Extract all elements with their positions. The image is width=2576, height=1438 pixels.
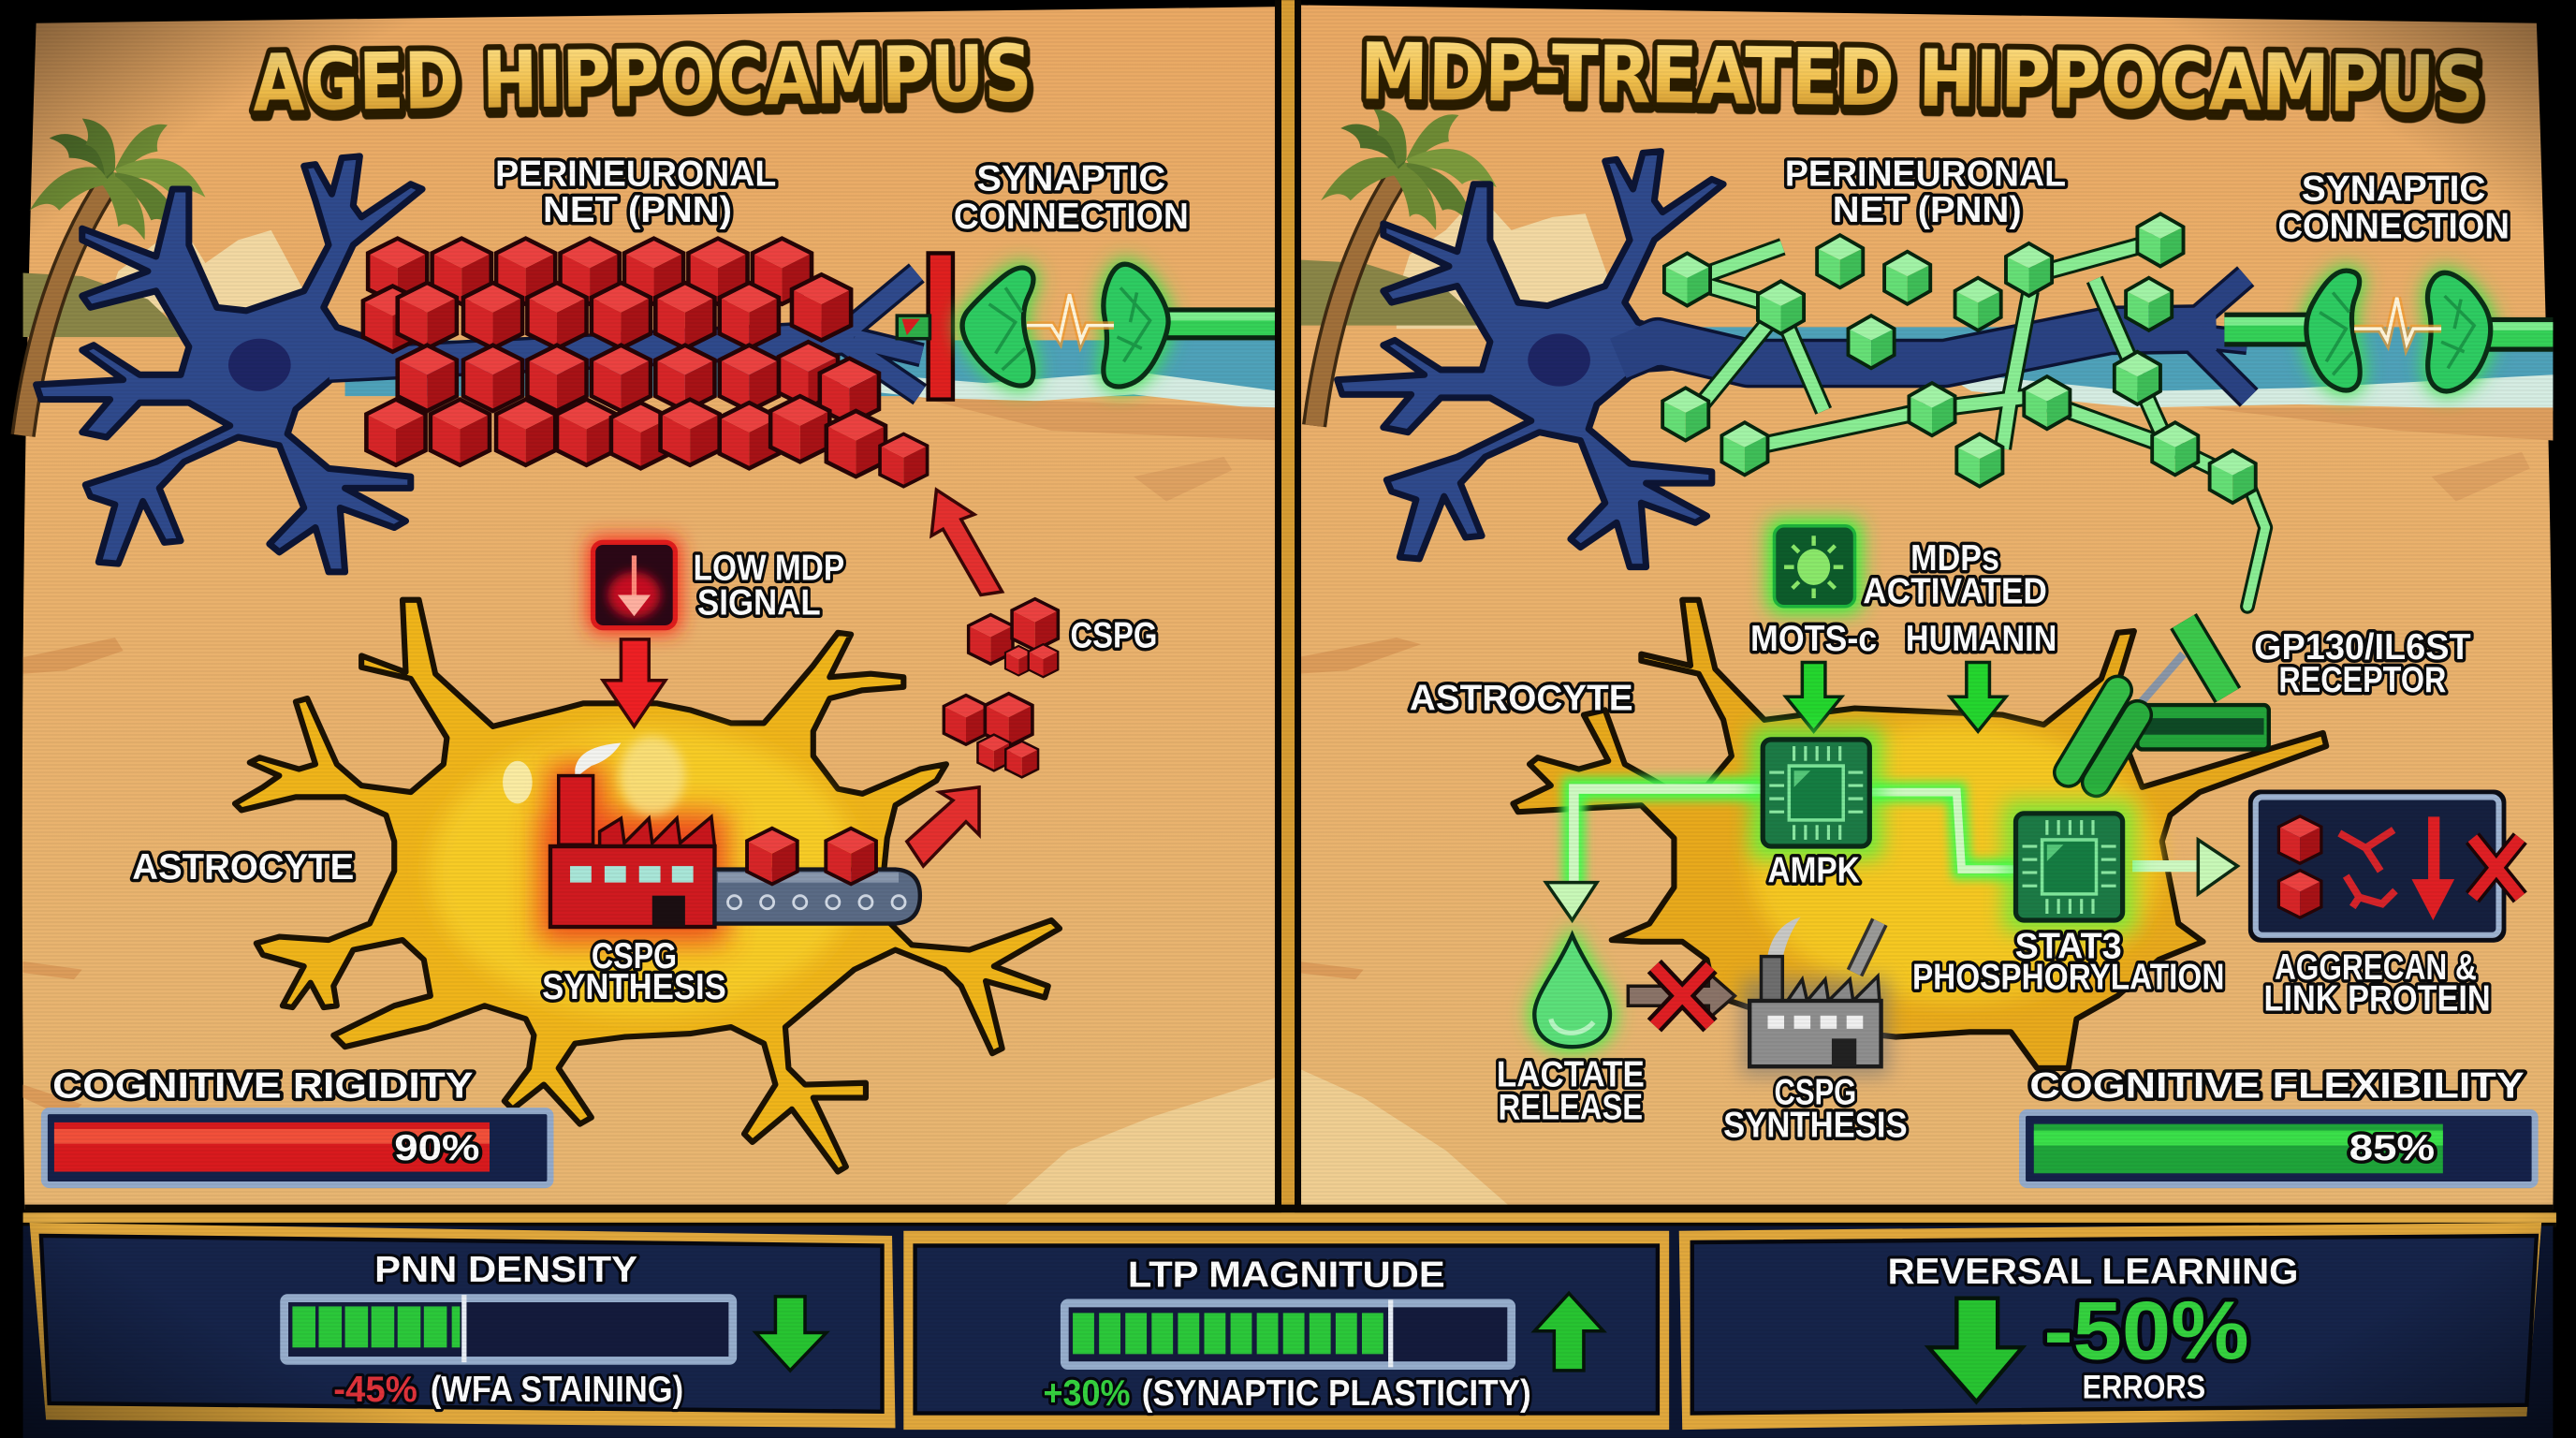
panel frame [1679,1223,2541,1430]
postsynaptic terminal [1104,264,1168,387]
nucleus [1528,333,1590,387]
beach scenery [23,224,1280,1208]
arrow: down [755,1297,827,1371]
label: AMPK: AMPK [1767,851,1860,891]
label: MOTS-c: MOTS-c [1750,619,1877,659]
arrow: conveyor to cluster [907,787,979,866]
heading: REVERSAL LEARNING [1888,1252,2298,1292]
panel: MDP-treated hippocampus [1298,5,2554,1210]
signal path: AMPK to lactate [1546,789,1763,920]
label: perineuronal net: NET (PNN) [1833,190,2022,230]
title: AGED HIPPOCAMPUS [253,27,1032,129]
panel background: sand [22,7,1280,1210]
panel: LTP magnitude [903,1231,1669,1430]
panel: reversal learning [1679,1223,2541,1430]
neuron [1338,152,2249,567]
stat panels strip [23,1223,2553,1438]
label: aggrecan and link protein: LINK PROTEIN [2264,979,2491,1020]
label: lactate release [1497,1054,1645,1127]
label: MDPs activated [1863,538,2047,611]
arrow: down [1928,1299,2023,1401]
meter track [44,1111,550,1185]
signal path: STAT3 to aggrecan output [2132,840,2237,894]
palm tree [1314,109,1497,426]
caption [333,1370,683,1410]
arrow: up [1534,1293,1603,1371]
chip: AMPK [1749,726,1882,859]
presynaptic terminal [2306,271,2360,390]
label: GP130/IL6ST receptor: GP130/IL6ST [2254,627,2471,668]
label: perineuronal net: NET (PNN) [543,190,732,230]
blocked synapse: red barrier and green terminals [897,253,1281,400]
label: astrocyte: ASTROCYTE [1410,678,1633,718]
nucleus [228,339,291,391]
arrow: low signal into astrocyte [603,639,666,726]
panel frame [903,1231,1669,1430]
label: synaptic connection: CONNECTION [2277,207,2510,247]
caption: ERRORS [2083,1370,2205,1406]
icon: MDPs activated [1767,520,1862,613]
strip background [23,1225,2553,1438]
value: 90% [394,1128,479,1168]
degraded perineuronal net: sparse green cubes and strands [1662,213,2265,607]
perineuronal net: dense red CSPG cubes [363,239,928,487]
label: STAT3 phosphorylation [1912,926,2224,998]
panel: PNN density [30,1223,896,1428]
chip: STAT3 [2002,800,2136,933]
arrow: cluster to net [931,490,1003,594]
meter fill [54,1123,490,1172]
label: STAT3 phosphorylation: PHOSPHORYLATION [1912,958,2224,998]
icon: GP130/IL6ST receptor [2069,622,2269,783]
label: cognitive flexibility: COGNITIVE FLEXIBILITY [2029,1066,2525,1107]
meter: cognitive flexibility [2023,1066,2535,1185]
arrow: humanin into cell [1950,662,2006,731]
red barrier [929,253,953,400]
progress bar [1064,1299,1512,1367]
progress bar [285,1295,733,1362]
postsynaptic axon [2489,317,2553,352]
astrocyte [1513,600,2326,1068]
label: lactate release: LACTATE [1497,1054,1645,1094]
postsynaptic terminal [2427,272,2491,391]
icon: lactate drop [1534,935,1610,1047]
label: synaptic connection: SYNAPTIC [2302,169,2485,209]
heading: LTP MAGNITUDE [1128,1255,1445,1295]
label: GP130/IL6ST receptor: RECEPTOR [2278,660,2446,700]
meter fill [2034,1124,2443,1173]
label: humanin: HUMANIN [1906,619,2056,659]
presynaptic axon [2224,313,2306,346]
inhibited output box: aggrecan and link protein [2252,794,2520,938]
synapse glow [962,264,1168,387]
conveyor belt with CSPG cubes [714,829,920,924]
label: CSPG synthesis: CSPG [592,936,677,976]
signal pulse [1027,294,1114,340]
label: synaptic connection [954,159,1189,237]
label: aggrecan and link protein [2264,947,2491,1020]
chimney [559,776,593,844]
label: low MDP signal: LOW MDP [694,549,844,589]
label: low MDP signal [694,549,844,624]
CSPG cluster lower [944,694,1038,777]
panel background: sand [1298,5,2554,1210]
value: minus fifty percent: -50% [2043,1285,2249,1377]
meter track [2023,1112,2535,1185]
label: CSPG: CSPG [1070,616,1157,656]
presynaptic terminal [962,268,1033,386]
red glow around factory [539,764,726,942]
smoke [575,742,621,779]
label: perineuronal net: PERINEURONAL [495,154,776,194]
label: synaptic connection: CONNECTION [954,197,1189,237]
heading: PNN DENSITY [374,1250,637,1290]
label: CSPG synthesis: CSPG [1775,1073,1856,1113]
label: synaptic connection: SYNAPTIC [976,159,1165,199]
label: perineuronal net [495,154,776,230]
label: lactate release: RELEASE [1499,1087,1643,1127]
signal path: AMPK to STAT3 [1869,792,2016,870]
icon: CSPG synthesis factory [550,742,714,927]
synapse glow [2306,271,2491,391]
palm tree [23,119,205,435]
label: GP130/IL6ST receptor [2254,627,2471,700]
neuron [37,156,922,572]
label: STAT3 phosphorylation: STAT3 [2015,926,2122,966]
panel: aged hippocampus [22,7,1281,1210]
meter: cognitive rigidity [44,1066,550,1185]
label: cognitive rigidity: COGNITIVE RIGIDITY [52,1066,474,1107]
healthy synapse: green terminals [2224,271,2553,391]
arrow: MOTS-c to AMPK [1786,662,1841,731]
label: CSPG synthesis [1723,1073,1908,1146]
CSPG cluster upper [969,599,1058,677]
value: 85% [2349,1128,2435,1168]
caption: (WFA STAINING) [431,1370,683,1410]
beach scenery [1298,194,2553,1208]
panel frame [30,1223,896,1428]
label: MDPs activated: MDPs [1910,538,1999,579]
postsynaptic axon [1160,307,1281,340]
caption: -45% [333,1370,417,1410]
icon: inactive CSPG factory [1741,917,1889,1077]
label: CSPG synthesis: SYNTHESIS [542,967,726,1007]
label: CSPG synthesis: SYNTHESIS [1723,1106,1908,1146]
label: aggrecan and link protein: AGGRECAN & [2275,947,2477,988]
label: perineuronal net [1785,154,2066,230]
astrocyte [235,600,1060,1172]
icon: low MDP signal [588,537,681,633]
label: astrocyte: ASTROCYTE [132,847,354,888]
label: perineuronal net: PERINEURONAL [1785,154,2066,194]
label: synaptic connection [2277,169,2510,247]
label: MDPs activated: ACTIVATED [1863,571,2047,611]
label: CSPG synthesis [542,936,726,1007]
signal pulse [2354,298,2441,344]
label: low MDP signal: SIGNAL [697,583,821,624]
caption: +30% [1043,1373,1131,1414]
blocked arrow: lactate to CSPG synthesis [1628,966,1734,1025]
caption: (SYNAPTIC PLASTICITY) [1142,1373,1531,1414]
